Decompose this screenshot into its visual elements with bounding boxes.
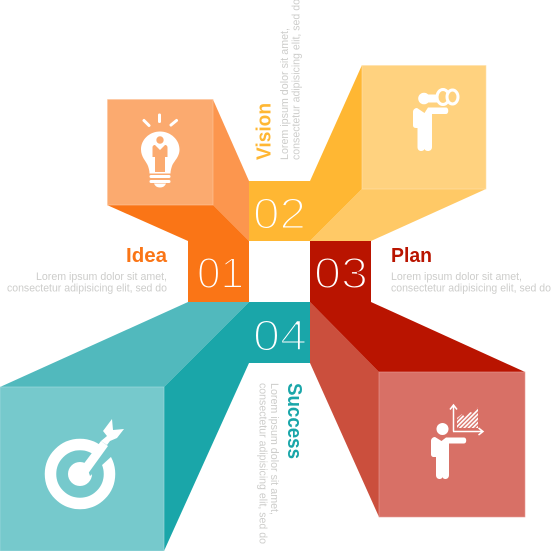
panel: idea box (107, 100, 249, 241)
icon: light bulb with person (141, 115, 180, 188)
number 01: 01 (197, 249, 244, 298)
number 03: 03 (314, 249, 368, 298)
text block: success: consectetur adipisicing elit, sed do (256, 383, 268, 544)
text block: plan (391, 244, 551, 294)
panel: step 02 (249, 181, 310, 241)
icon: person with binoculars (413, 90, 458, 151)
text block: success (256, 383, 306, 544)
icon: target with arrow (50, 419, 124, 504)
text block: vision (252, 0, 302, 160)
number 02: 02 (253, 190, 306, 238)
text block: success: Lorem ipsum dolor sit amet, (268, 383, 280, 515)
panel: step 04 (249, 302, 310, 363)
panel: step 03 (310, 241, 371, 302)
icon: presenter with chart (431, 405, 483, 479)
panel: plan box (310, 302, 525, 517)
text block: idea: consectetur adipisicing elit, sed do (7, 282, 167, 294)
text block: plan: Plan (391, 244, 432, 267)
panel: vision box (310, 65, 486, 241)
text block: success: Success (283, 383, 306, 459)
number 04: 04 (253, 312, 307, 360)
text block: idea: Idea (126, 244, 168, 267)
text block: vision: Lorem ipsum dolor sit amet, (279, 28, 291, 160)
text block: vision: Vision (252, 103, 276, 160)
panel: step 01 (188, 241, 249, 302)
text block: plan: Lorem ipsum dolor sit amet, (391, 271, 522, 283)
panel: success box (0, 302, 249, 551)
text block: idea: Lorem ipsum dolor sit amet, (36, 271, 167, 283)
text block: idea (7, 244, 168, 294)
